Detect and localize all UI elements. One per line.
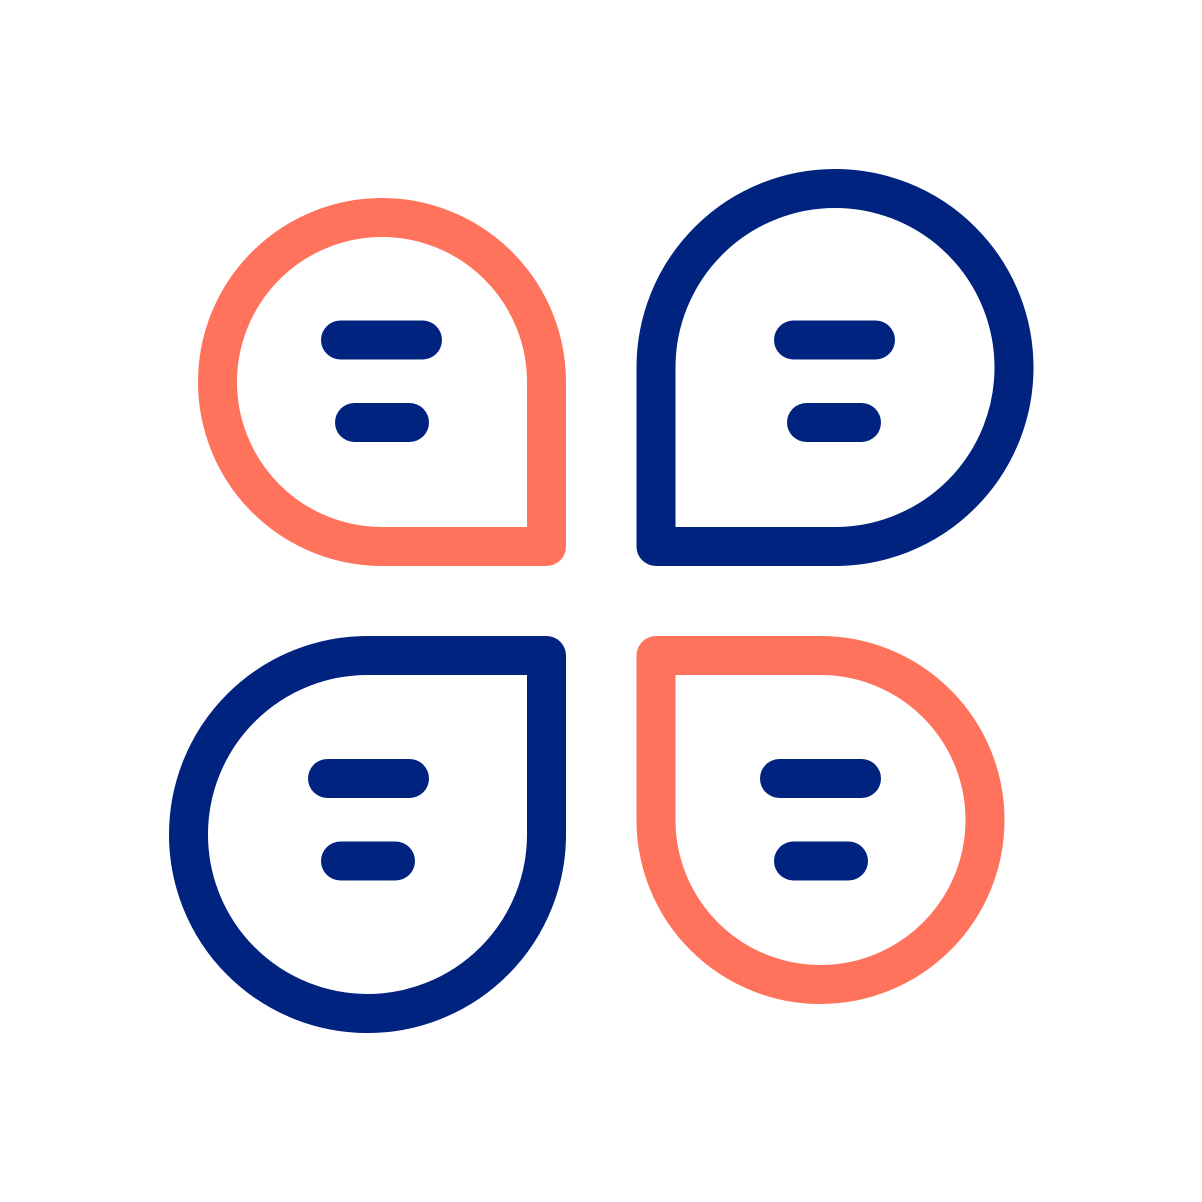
text lines: top right	[774, 320, 895, 442]
bubble outline: top left	[218, 218, 547, 546]
petal: bottom left (navy)	[188, 656, 546, 1014]
text lines: bottom right	[760, 759, 881, 880]
bubble outline: bottom right	[656, 656, 985, 984]
petal: bottom right (coral)	[656, 656, 985, 984]
petal: top left (coral)	[218, 218, 547, 546]
text lines: bottom left	[308, 759, 429, 880]
text lines: top left	[321, 320, 442, 442]
bubble outline: bottom left	[188, 656, 546, 1014]
petal: top right (navy)	[656, 188, 1014, 546]
bubble outline: top right	[656, 188, 1014, 546]
